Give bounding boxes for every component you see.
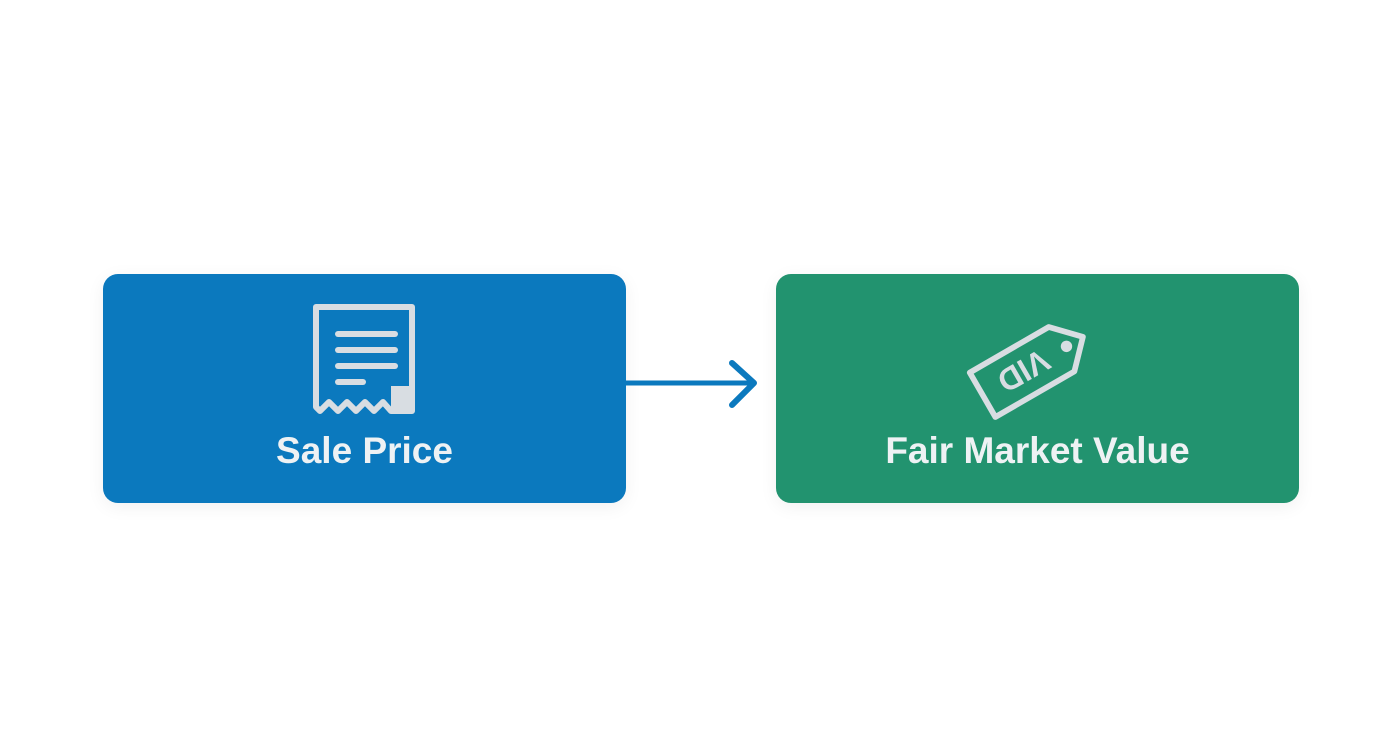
icon: price tag [966, 324, 1086, 420]
label: Fair Market Value: Fair Market Value [885, 430, 1190, 471]
label: Sale Price: Sale Price [276, 430, 453, 471]
icon: receipt [313, 304, 415, 414]
icon: price tag: VID [991, 342, 1056, 400]
panel: fair market value [776, 274, 1299, 503]
panel: sale price [103, 274, 626, 503]
arrow [626, 360, 757, 408]
